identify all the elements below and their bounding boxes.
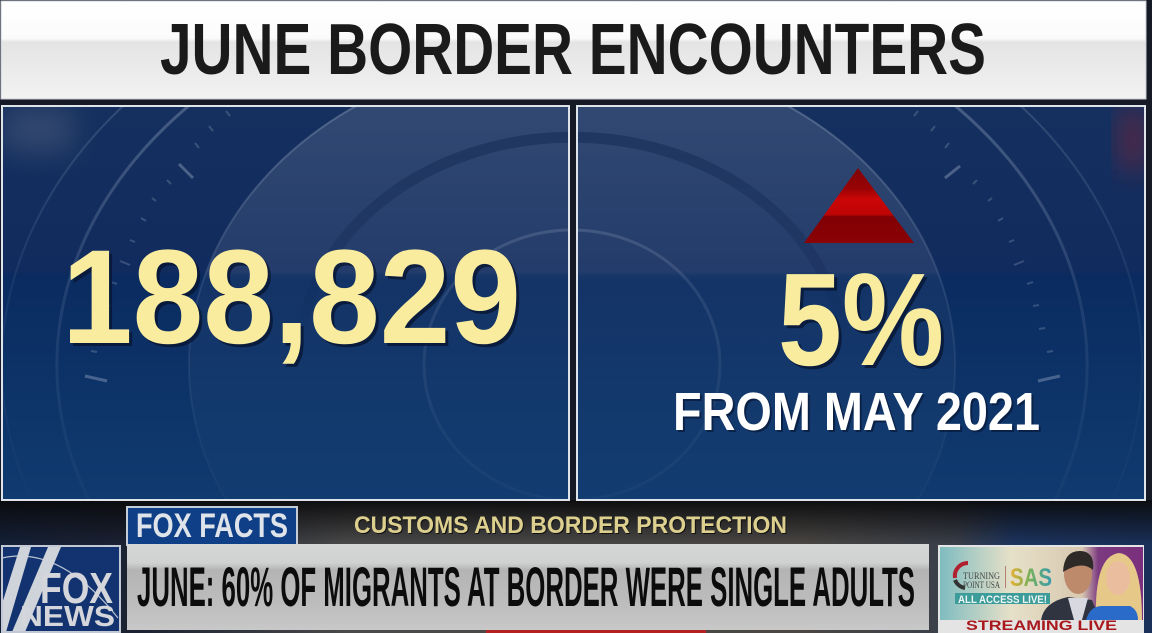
- icon: Fox News logo: [0, 545, 121, 633]
- source label: CUSTOMS AND BORDER PROTECTION: [354, 512, 787, 539]
- panel: total encounters: [1, 105, 570, 501]
- headline bar: [127, 544, 929, 630]
- source label: CUSTOMS AND BORDER PROTECTION: [355, 513, 788, 540]
- Fox Facts tag: FOX FACTS: [136, 507, 288, 545]
- total encounters number: 188,829: [62, 223, 521, 372]
- ad: streaming live promo: [938, 545, 1144, 633]
- icon: red up triangle: [804, 168, 914, 243]
- comparison label: FROM MAY 2021: [673, 382, 1040, 442]
- ad: streaming live promo: TURNING: [963, 572, 1000, 582]
- icon: Fox News logo: NEWS: [20, 601, 115, 633]
- percent change: 5%: [781, 249, 947, 396]
- ad: streaming live promo: STREAMING LIVE: [966, 617, 1117, 633]
- ad: streaming live promo: SAS: [1010, 564, 1052, 592]
- lower strip background: [0, 500, 1152, 633]
- ad: streaming live promo: POINT USA: [963, 581, 1000, 591]
- panel: change from May: [576, 105, 1146, 501]
- red bar accent: [486, 630, 706, 633]
- total encounters number: 188,829: [65, 226, 524, 375]
- ad: streaming live promo: ALL ACCESS LIVE!: [958, 594, 1047, 606]
- percent change: 5%: [778, 246, 944, 393]
- title banner: [1, 1, 1146, 99]
- icon: Fox News logo: FOX: [40, 564, 113, 613]
- comparison label: FROM MAY 2021: [675, 384, 1042, 444]
